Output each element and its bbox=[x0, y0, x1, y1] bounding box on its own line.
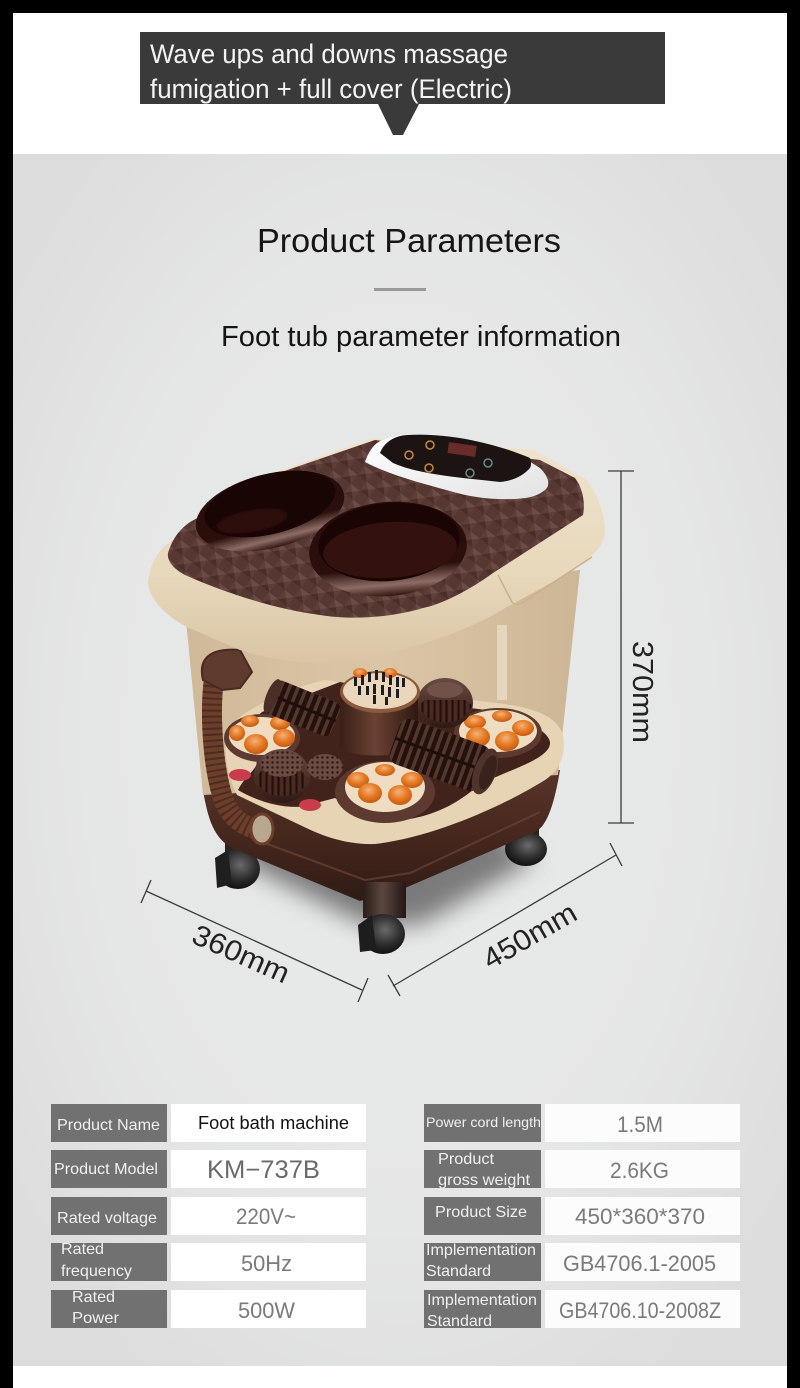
row: power cord length bbox=[424, 1104, 740, 1142]
row: implementation standard 1: Implementation bbox=[426, 1242, 536, 1259]
water hose bbox=[202, 650, 273, 844]
banner text bbox=[150, 39, 512, 104]
row: product name: Foot bath machine bbox=[198, 1113, 349, 1133]
row: rated power: 500W bbox=[238, 1298, 295, 1323]
row: rated frequency: Rated bbox=[61, 1241, 104, 1258]
row: product gross weight bbox=[424, 1150, 740, 1189]
digital display bbox=[447, 442, 477, 457]
row: rated voltage bbox=[51, 1197, 366, 1235]
banner text: Wave ups and downs massage bbox=[150, 39, 508, 69]
row: implementation standard 1: Standard bbox=[426, 1263, 491, 1280]
caster: front bbox=[358, 882, 406, 954]
row: rated voltage: 220V~ bbox=[236, 1204, 296, 1229]
massage pad: right bbox=[454, 708, 542, 758]
central massage column bbox=[340, 668, 420, 756]
rim handle bbox=[498, 557, 592, 604]
banner text: fumigation + full cover (Electric) bbox=[150, 74, 512, 104]
tub body bbox=[185, 570, 580, 795]
row: rated voltage: Rated voltage bbox=[57, 1210, 157, 1227]
row: power cord length: Power cord length bbox=[426, 1114, 541, 1130]
caster: left bbox=[215, 835, 260, 889]
parameter table: right column bbox=[424, 1104, 740, 1330]
unit base bbox=[203, 770, 560, 901]
massage recess bbox=[234, 682, 550, 822]
row: rated power: Rated bbox=[72, 1289, 115, 1306]
row: rated frequency: frequency bbox=[61, 1263, 132, 1280]
row: power cord length: 1.5M bbox=[617, 1112, 663, 1137]
speaker grille bbox=[307, 754, 343, 780]
subheading: Foot tub parameter information bbox=[221, 321, 621, 353]
dimension: depth 450mm bbox=[388, 843, 622, 996]
heading: Product Parameters bbox=[257, 222, 561, 259]
row: product model: Product Model bbox=[54, 1161, 158, 1178]
rim bbox=[148, 438, 605, 663]
row: implementation standard 2 bbox=[424, 1290, 740, 1330]
massage pad: front bbox=[335, 761, 435, 823]
row: product gross weight: gross weight bbox=[438, 1172, 531, 1189]
row: product name bbox=[51, 1104, 366, 1142]
control panel bbox=[365, 434, 548, 499]
dimension: height 370mm: 370mm bbox=[626, 641, 658, 743]
floor shadow bbox=[235, 830, 535, 925]
row: product model bbox=[51, 1150, 366, 1188]
red buttons bbox=[229, 769, 321, 811]
dimension: depth 450mm: 450mm bbox=[478, 897, 583, 976]
row: product size bbox=[424, 1197, 740, 1235]
parameter table: left column bbox=[51, 1104, 366, 1328]
row: rated frequency bbox=[51, 1241, 366, 1281]
hose connector bbox=[202, 650, 252, 690]
roller: front right bbox=[387, 716, 504, 798]
dome: front left bbox=[254, 749, 310, 803]
product illustration: foot bath bbox=[148, 434, 605, 954]
row: product gross weight: 2.6KG bbox=[610, 1158, 669, 1183]
dome: back right bbox=[417, 678, 473, 728]
inner tray bbox=[226, 680, 564, 844]
foot opening: left bbox=[187, 457, 353, 565]
dimension: width 360mm bbox=[141, 880, 368, 1002]
panel buttons bbox=[405, 441, 492, 477]
row: rated power: Power bbox=[72, 1310, 120, 1327]
row: implementation standard 2: Standard bbox=[427, 1313, 492, 1330]
massage pad: left bbox=[224, 714, 300, 762]
lid bbox=[168, 440, 584, 618]
row: rated power bbox=[51, 1289, 366, 1328]
row: product size: Product Size bbox=[435, 1204, 527, 1221]
row: implementation standard 2: GB4706.10-2008Z bbox=[559, 1298, 721, 1323]
row: product size: 450*360*370 bbox=[575, 1204, 705, 1229]
top banner callout bbox=[140, 32, 665, 135]
dimension: width 360mm: 360mm bbox=[187, 919, 294, 990]
row: product model: KM−737B bbox=[207, 1156, 320, 1184]
foot opening: right bbox=[305, 495, 471, 603]
row: product name: Product Name bbox=[57, 1117, 160, 1134]
roller: back left bbox=[260, 677, 342, 738]
row: rated frequency: 50Hz bbox=[241, 1251, 292, 1276]
row: implementation standard 1: GB4706.1-2005 bbox=[563, 1251, 716, 1276]
caster: back right bbox=[505, 815, 547, 866]
row: implementation standard 1 bbox=[424, 1242, 740, 1281]
row: product gross weight: Product bbox=[438, 1151, 495, 1168]
body highlight strip bbox=[497, 625, 507, 700]
dimension: height 370mm bbox=[608, 471, 658, 823]
row: implementation standard 2: Implementation bbox=[427, 1292, 537, 1309]
massage spikes bbox=[354, 670, 405, 705]
